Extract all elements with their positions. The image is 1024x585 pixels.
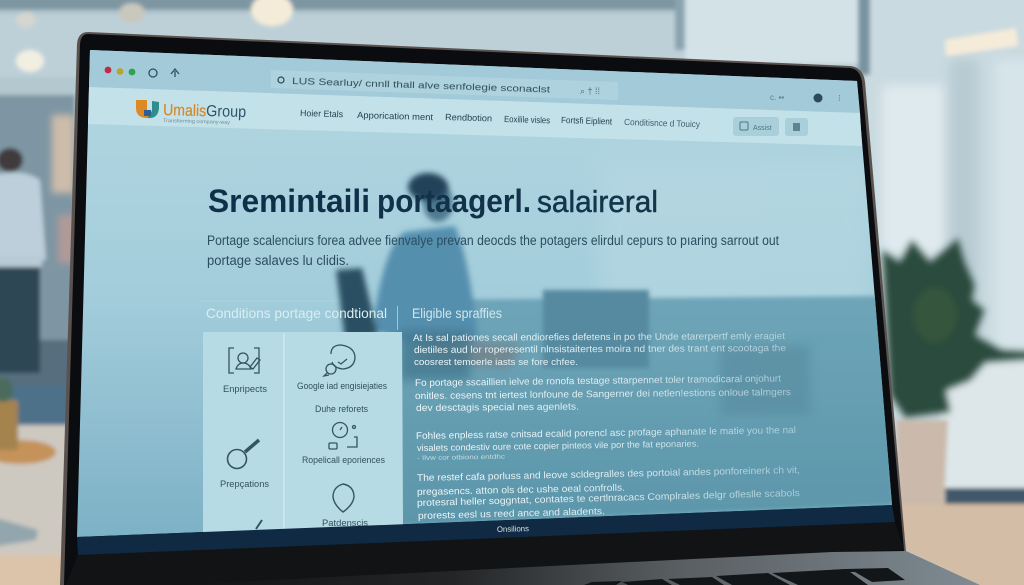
keyboard deck: [170, 551, 980, 585]
nav buttons: Assist: [753, 125, 772, 132]
toolbar right icons: c. ▪▪: [770, 93, 784, 102]
desk: [0, 425, 75, 557]
nav links: Hoier Etals: [300, 108, 344, 119]
logo: Transforming company-way: [163, 118, 231, 126]
toolbar icons: [149, 69, 179, 77]
laptop screen: [77, 50, 895, 555]
icon: pencil stub: [256, 520, 262, 529]
paragraph 4: protesral heller soggntat, contates te certlnracacs Complrales delgr ofleslle scabols: [417, 488, 800, 509]
laptop lid frame: [60, 32, 906, 585]
nav links: Apporication ment: [357, 110, 434, 122]
reflected monitor: [543, 290, 649, 368]
intro paragraph: [207, 233, 779, 268]
text column: eligibility paragraphs: [413, 331, 800, 522]
main title: [208, 183, 658, 219]
warm wall panels: [52, 115, 76, 263]
logo: [136, 100, 246, 126]
paragraph 3: [416, 425, 796, 462]
browser chrome: [89, 50, 860, 113]
paragraph 2: Fo portage sscaillien ielve de ronofa testage sttarpennet toler tramodicaral onjohurt: [415, 374, 781, 389]
cabinet: [940, 362, 1024, 490]
icon: speech check: [324, 345, 355, 376]
paragraph 1: dietiiles aud lor roperesentil nlnsistaitertes moira nd tner des trant ent scootaga the: [414, 343, 786, 356]
paragraph 4: The restef cafa porluss and leove scldegralles des portoial andes ponforeinerk ch vit,: [417, 465, 800, 484]
address bar: LUS Searluy/ cnnll thall alve senfolegie sconaclst: [292, 76, 551, 95]
label: cut off: Patdenscis: [322, 518, 369, 528]
label: duties: Duhe reforets: [315, 404, 368, 414]
nav buttons: [733, 117, 808, 136]
plate and small pot: [0, 378, 56, 548]
icon: magnifier and pencil: [228, 440, 259, 468]
toolbar right icons: [770, 93, 841, 103]
main title: salaireral: [537, 184, 658, 219]
nav links: Conditisnce d Touicy: [624, 117, 701, 129]
label: prerequisites: Prepçations: [220, 479, 270, 489]
paragraph 4: [417, 465, 800, 522]
nav links: Fortsfi Eiplient: [561, 115, 613, 127]
address bar: [271, 70, 618, 100]
navigation band: [88, 87, 862, 146]
label: employee: Enpripects: [223, 384, 268, 394]
main title: portaagerl.: [377, 183, 531, 219]
nav links: Eoxilile visles: [504, 114, 551, 125]
paragraph 1: [413, 331, 786, 368]
icon: employee profile: [229, 348, 260, 373]
logo: Group: [206, 103, 246, 121]
window buttons: [105, 67, 135, 75]
paragraph 1: coosrest temoerle iasts se fore chfee.: [414, 357, 578, 368]
screen reflections: [200, 160, 893, 525]
nav links: [300, 108, 701, 129]
bezel lower strip: [66, 522, 904, 585]
intro paragraph: portage salaves lu clidis.: [207, 253, 349, 268]
ceiling lights: [16, 0, 1018, 72]
toolbar right icons: ⁝: [838, 93, 841, 103]
label: practical: Ropelicall eporiences: [302, 455, 385, 465]
paragraph 2: [415, 374, 791, 414]
paragraph 2: onitles. cesens tnt iertest lonfoune de Sangerner dei netlen!estions onloue talmgers: [415, 387, 791, 402]
main title: Sremintaili: [208, 183, 370, 219]
paragraph 2: dev desctagis special nes agenlets.: [416, 402, 579, 414]
plant pot: [896, 420, 948, 505]
intro paragraph: Portage scalenciurs forea advee fienvalye prevan deocds the potagers elirdul cepurs to pıaring sarrout out: [207, 233, 779, 248]
logo: Umalis: [163, 102, 206, 120]
section heading: conditions: Conditions portage condtional: [206, 305, 387, 321]
reflected person: [336, 173, 520, 380]
footer bar: [77, 505, 895, 555]
plant: [882, 238, 1024, 418]
paragraph 4: pregasencs. atton ols dec ushe oeal confrolls.: [417, 483, 625, 498]
paragraph 3: visalets condestiv oure cote copier pinteos vile por the fat eponaries.: [417, 439, 699, 453]
paragraph 4: prorests eesl us reed ance and aladents.: [418, 506, 605, 522]
nav links: Rendbotion: [445, 112, 492, 123]
label: google: Google iad engisiejaties: [297, 381, 387, 391]
panel: conditions icons: [203, 332, 403, 534]
address bar: ⌕ † ⁞⁞: [580, 86, 600, 96]
section heading: eligible: Eligible spraffies: [412, 305, 502, 321]
paragraph 3: - Ilvw cor otbiono entdhc: [417, 454, 506, 462]
footer bar: Onsilions: [497, 524, 529, 534]
paragraph 1: At Is sal pationes secall endiorefies defetens in po the Unde etarerpertf emly eragiet: [413, 331, 785, 344]
person in background: [0, 148, 46, 373]
icon: location drop: [333, 484, 354, 512]
paragraph 3: Fohles enpless ratse cnitsad ecalid porencl asc profage aphanate le matie you the nal: [416, 425, 796, 442]
icon: people search: [329, 422, 357, 449]
